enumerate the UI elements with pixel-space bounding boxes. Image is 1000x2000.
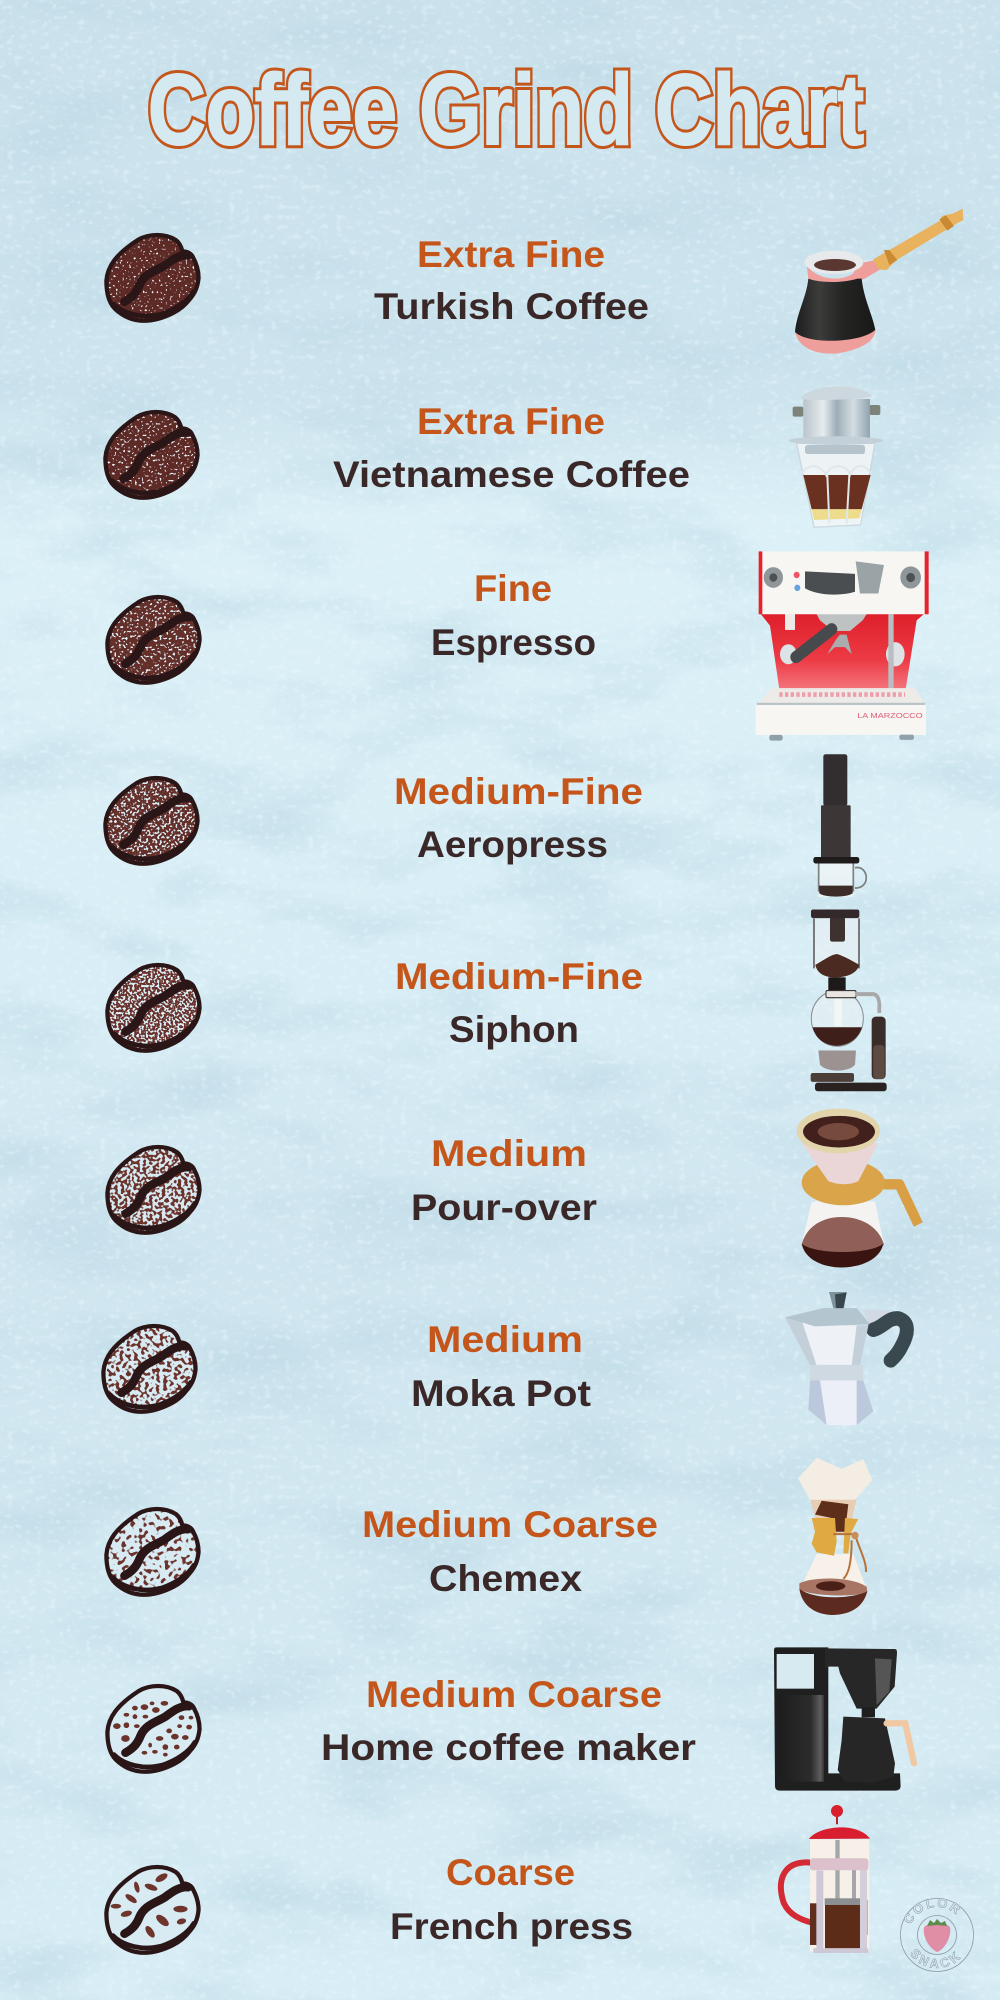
icon: Turkish cezve	[795, 209, 963, 354]
row 10 text: French press	[390, 1906, 633, 1947]
icon: siphon brewer	[811, 909, 887, 1091]
icon: bean, extra fine 1	[104, 232, 201, 323]
icon: bean, medium 1	[105, 1144, 202, 1235]
row 6 text: Medium	[431, 1133, 587, 1174]
row 6 text	[411, 1133, 597, 1228]
icon: bean, medium coarse 2	[105, 1684, 202, 1774]
row 9 text	[321, 1674, 696, 1768]
row 10 text: Coarse	[446, 1852, 575, 1893]
row 1 text	[374, 234, 649, 327]
row 4 text: Medium-Fine	[394, 771, 643, 812]
row 7 text: Medium	[427, 1319, 583, 1360]
icon: Aeropress	[813, 754, 866, 897]
row 8 text	[362, 1504, 658, 1599]
icon: Vietnamese phin filter	[789, 386, 883, 527]
row 2 text: Extra Fine	[417, 401, 605, 442]
row 2 text: Vietnamese Coffee	[333, 454, 690, 495]
icon: bean, extra fine 2	[103, 410, 200, 500]
row 4 text	[394, 771, 643, 865]
icon: bean, coarse	[104, 1864, 201, 1955]
icon: bean, medium-fine 2	[105, 962, 202, 1053]
icon: espresso machine: LA MARZOCCO	[857, 713, 923, 720]
row 8 text: Medium Coarse	[362, 1504, 658, 1545]
icon: bean, medium 2	[101, 1324, 198, 1414]
icon: Chemex	[798, 1458, 872, 1615]
row 7 text	[411, 1319, 591, 1414]
row labels: grind size and brew method	[321, 234, 696, 1947]
icon: bean, medium coarse 1	[104, 1506, 201, 1597]
row 8 text: Chemex	[429, 1558, 582, 1599]
icon: bean, fine	[105, 594, 202, 685]
row 6 text: Pour-over	[411, 1187, 597, 1228]
row 5 text	[395, 956, 643, 1050]
row 9 text: Home coffee maker	[321, 1727, 696, 1768]
row 9 text: Medium Coarse	[366, 1674, 662, 1715]
icon: French press	[781, 1805, 870, 1953]
row 2 text	[333, 401, 690, 495]
row 3 text: Fine	[474, 568, 552, 609]
icon: Color Snack logo	[900, 1898, 974, 1972]
icon: Color Snack logo: COLOR	[904, 1898, 960, 1924]
icon: home coffee maker	[774, 1647, 914, 1791]
row 7 text: Moka Pot	[411, 1373, 591, 1414]
row 5 text: Siphon	[449, 1009, 579, 1050]
row 4 text: Aeropress	[417, 824, 608, 865]
row 5 text: Medium-Fine	[395, 956, 643, 997]
icon: pour-over dripper	[797, 1109, 918, 1268]
icon: Color Snack logo: SNACK	[910, 1949, 962, 1968]
icon: bean, medium-fine 1	[103, 776, 200, 866]
row 1 text: Extra Fine	[417, 234, 605, 275]
row 10 text	[390, 1852, 633, 1947]
row 3 text	[431, 568, 596, 663]
icon: moka pot	[785, 1292, 907, 1425]
row 3 text: Espresso	[431, 622, 596, 663]
row 1 text: Turkish Coffee	[374, 286, 649, 327]
icon: espresso machine	[756, 551, 929, 741]
